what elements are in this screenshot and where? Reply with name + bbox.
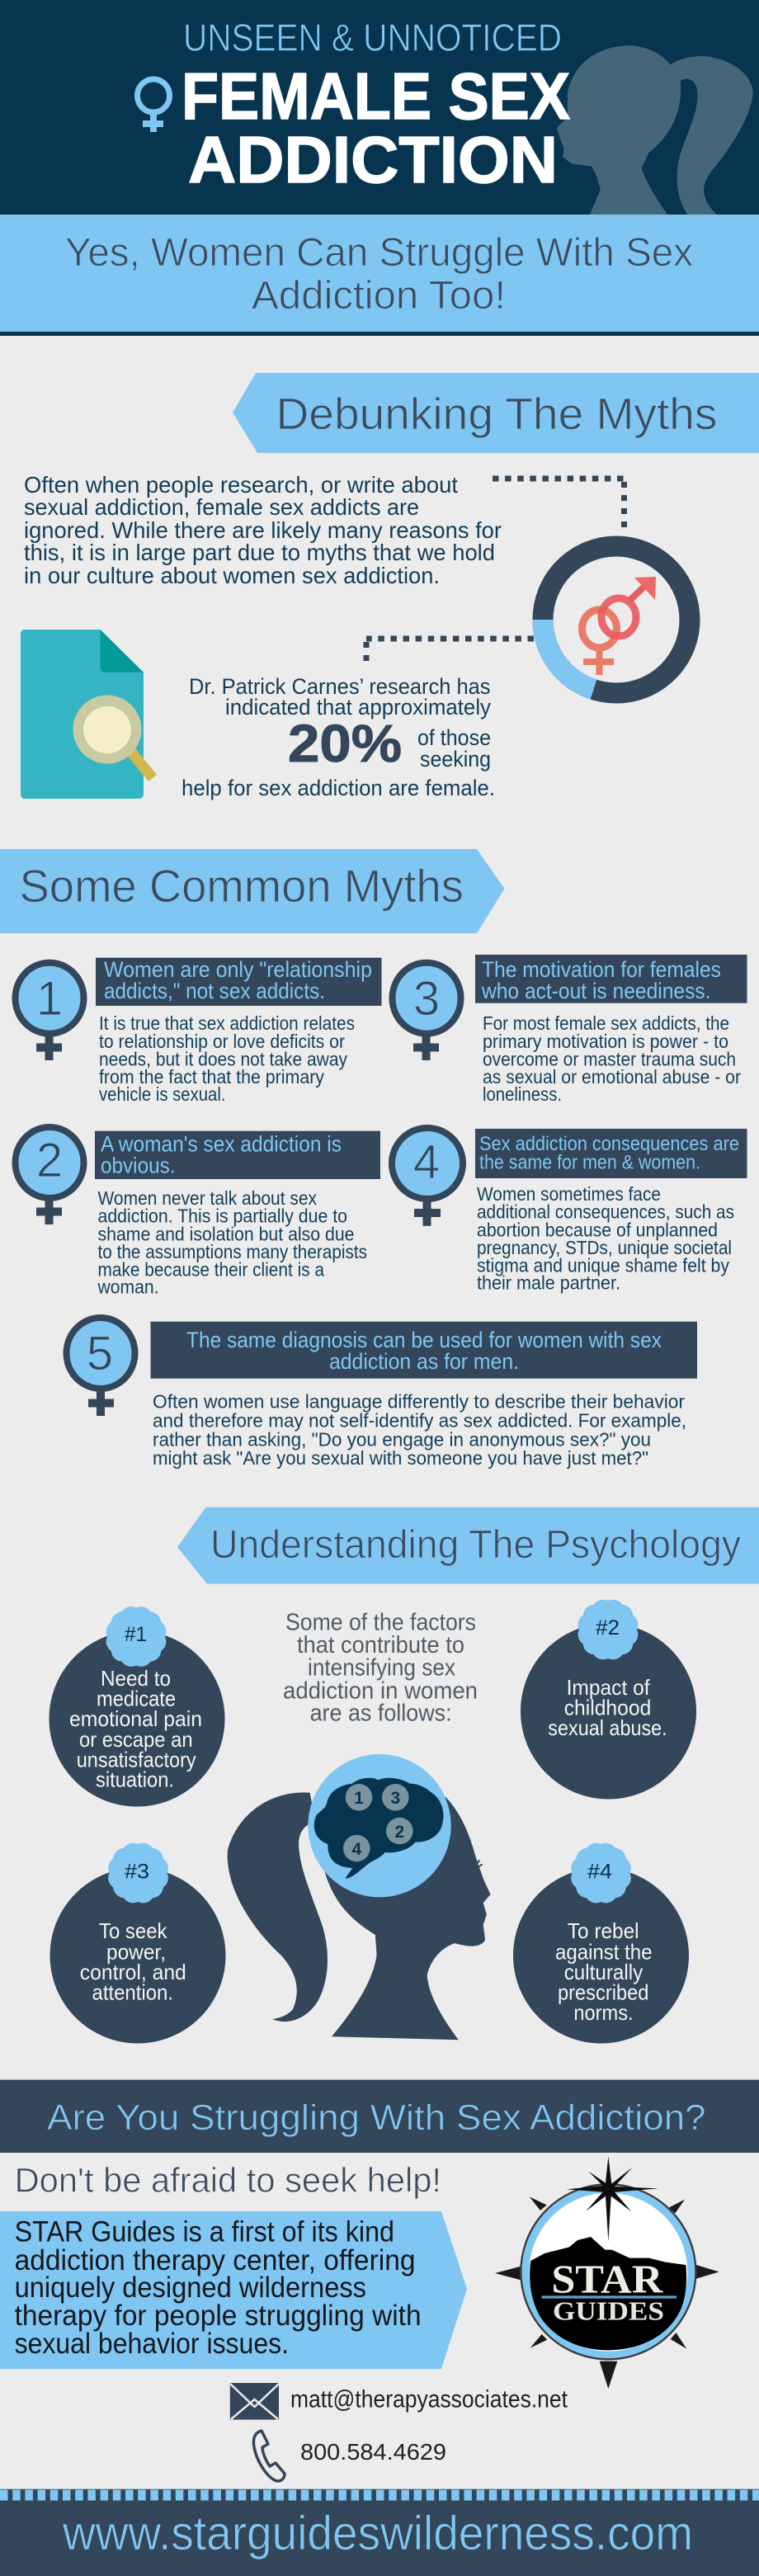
footer banner: website: www.starguideswilderness.com [62, 2507, 693, 2560]
contact: phone: 800.584.4629 [300, 2439, 446, 2465]
banner: understanding the psychology: Understanding The Psychology [210, 1523, 741, 1567]
myth 5 body: Often women use language differently to describe their behavior [153, 1391, 685, 1413]
statistic text: help for sex addiction are female. [182, 776, 495, 800]
myth 3 body: as sexual or emotional abuse - or [483, 1066, 741, 1087]
myth 3 body: loneliness. [483, 1083, 562, 1105]
myth 1 body: needs, but it does not take away [99, 1049, 347, 1070]
myth 4 heading: the same for men & women. [479, 1152, 700, 1174]
myth 3 heading: The motivation for females [482, 957, 721, 982]
heading: seek help: Don't be afraid to seek help! [15, 2161, 441, 2200]
intro text: contributing factors: are as follows: [310, 1701, 452, 1727]
intro text: contributing factors: that contribute to [297, 1632, 464, 1658]
myth 4 body: pregnancy, STDs, unique societal [477, 1237, 732, 1258]
myth 5 heading: addiction as for men. [329, 1349, 519, 1374]
statistic text [182, 674, 495, 800]
factor 1 text: unsatisfactory [77, 1748, 196, 1772]
icon: number 2 female symbol [15, 1127, 84, 1224]
icon: document with magnifier [21, 630, 153, 799]
myth 1 body [99, 1012, 355, 1105]
myth 3 [393, 955, 747, 1105]
myth 2 [15, 1127, 380, 1297]
title line: addiction: ADDICTION [188, 123, 558, 196]
icon: envelope [230, 2383, 279, 2419]
brain [314, 1778, 444, 1879]
myth 1 body: from the fact that the primary [99, 1066, 324, 1087]
myth 2 body: woman. [97, 1276, 158, 1297]
icon: number 1 female symbol [15, 963, 84, 1060]
myth 2 body [97, 1187, 367, 1297]
contact: email [230, 2383, 568, 2419]
myth 2 body: Women never talk about sex [97, 1187, 317, 1209]
icon: number 5 female symbol [66, 1318, 135, 1416]
myth 3 body [483, 1012, 741, 1105]
myth 3 heading: who act-out is neediness. [481, 979, 711, 1003]
factor 2 text: sexual abuse. [548, 1715, 667, 1740]
panel: star guides description [0, 2211, 467, 2369]
intro paragraph [24, 472, 502, 588]
icon: number 2 female symbol: 2 [36, 1134, 63, 1187]
icon: number 4 female symbol: 4 [413, 1135, 440, 1189]
myth 1 heading [96, 957, 381, 1006]
head silhouette [557, 45, 753, 215]
icon: number 3 female symbol: 3 [413, 972, 440, 1026]
panel: star guides description: therapy for people struggling with [15, 2300, 422, 2332]
myth 4 heading: Sex addiction consequences are [479, 1133, 739, 1155]
star [567, 2156, 658, 2242]
factor 4 text: against the [555, 1939, 652, 1964]
myth 2 heading: A woman's sex addiction is [101, 1132, 342, 1157]
banner: debunking the myths: Debunking The Myths [276, 389, 718, 439]
myth 1 body: to relationship or love deficits or [99, 1031, 345, 1052]
myth 2 body: shame and isolation but also due [97, 1223, 355, 1244]
myth 4 body: abortion because of unplanned [477, 1219, 718, 1240]
myth 4 heading [475, 1129, 747, 1178]
factor 3 circle [50, 1843, 226, 2043]
panel: star guides description: sexual behavior issues. [15, 2328, 289, 2360]
factor 2 text: Impact of [567, 1675, 650, 1700]
myth 3 body: For most female sex addicts, the [483, 1012, 729, 1034]
myth 1 heading: Women are only "relationship [104, 957, 372, 982]
logo: star guides compass [495, 2156, 719, 2389]
statistic text: of those [417, 725, 491, 750]
factor 3 text [80, 1918, 186, 2004]
intro paragraph: sexual addiction, female sex addicts are [24, 494, 419, 520]
myth 1 body: vehicle is sexual. [99, 1083, 226, 1105]
subtitle text line 1: Yes, Women Can Struggle With Sex [65, 231, 693, 275]
logo wordmark star: STAR [551, 2258, 664, 2301]
footer banner: website [0, 2489, 759, 2576]
logo wordmark guides: GUIDES [553, 2297, 664, 2326]
statistic text: Dr. Patrick Carnes’ research has [189, 674, 490, 699]
woman silhouette with brain [228, 1754, 491, 2040]
factor 2 text [548, 1675, 667, 1740]
brain: 1 [354, 1789, 364, 1808]
brain: 4 [351, 1840, 361, 1859]
statistic text: seeking [420, 747, 491, 771]
factor 4 text: To rebel [568, 1918, 639, 1943]
badge 2: #2 [596, 1616, 620, 1639]
factor 1 text: situation. [96, 1767, 174, 1791]
panel: star guides description: STAR Guides is a first of its kind [15, 2215, 394, 2248]
intro text: contributing factors: addiction in women [283, 1677, 478, 1704]
myth 4 body: stigma and unique shame felt by [477, 1255, 729, 1276]
intro text: contributing factors [283, 1609, 478, 1727]
myth 1 heading: addicts," not sex addicts. [104, 979, 325, 1003]
factor 1 circle [50, 1606, 224, 1807]
eyelash [474, 1860, 483, 1871]
brain: 2 [394, 1823, 404, 1842]
factor 2 text: childhood [564, 1695, 651, 1720]
badge 4: #4 [587, 1860, 612, 1883]
myth 2 heading [95, 1131, 380, 1179]
icon: number 5 female symbol: 5 [87, 1327, 113, 1380]
myth 5 body: and therefore may not self-identify as sex addicted. For example, [153, 1409, 686, 1431]
title line: unseen and unnoticed: UNSEEN & UNNOTICED [183, 17, 562, 59]
myth 3 heading [475, 955, 747, 1003]
factor 4 text: prescribed [558, 1979, 648, 2004]
factor 4 text [555, 1918, 652, 2025]
panel: star guides description: addiction therapy center, offering [15, 2244, 415, 2276]
factor 3 text: attention. [92, 1979, 173, 2004]
myth 4 body: their male partner. [477, 1272, 620, 1294]
banner: are you struggling [0, 2080, 759, 2153]
icon: number 1 female symbol: 1 [36, 972, 63, 1026]
head circle [308, 1754, 451, 1897]
myth 3 body: primary motivation is power - to [483, 1031, 728, 1052]
myth 4 body: additional consequences, such as [477, 1201, 734, 1223]
factor 1 text: Need to [101, 1666, 171, 1691]
intro text: contributing factors: Some of the factors [285, 1609, 476, 1635]
badge 1: #1 [125, 1623, 147, 1646]
myth 2 body: addiction. This is partially due to [97, 1205, 347, 1227]
factor 3 text: control, and [80, 1960, 186, 1984]
myth 2 body: make because their client is a [97, 1259, 324, 1281]
factor 1 text: or escape an [79, 1727, 193, 1752]
myth 5 heading [150, 1322, 697, 1379]
badge 2 [578, 1600, 638, 1659]
myth 2 heading: obvious. [101, 1154, 175, 1178]
compass ticks [495, 2196, 719, 2389]
header panel [0, 0, 759, 215]
factor 3 text: power, [106, 1939, 166, 1964]
mountain [530, 2237, 686, 2350]
panel: star guides description: uniquely designed wilderness [15, 2272, 366, 2304]
myth 5 [66, 1318, 697, 1469]
myth 5 body [153, 1391, 686, 1469]
subtitle text line 2: Addiction Too! [252, 274, 506, 318]
myth 4 body: Women sometimes face [477, 1183, 661, 1205]
icon: number 3 female symbol [393, 963, 460, 1060]
badge 1 [106, 1606, 166, 1667]
myth 5 body: rather than asking, "Do you engage in anonymous sex?" you [153, 1428, 651, 1450]
myth 2 body: to the assumptions many therapists [97, 1241, 367, 1262]
factor 1 text: emotional pain [69, 1706, 202, 1731]
badge 4 [571, 1843, 631, 1903]
contact: email: matt@therapyassociates.net [290, 2386, 568, 2413]
factor 4 circle [513, 1843, 689, 2043]
brain: 3 [390, 1789, 400, 1808]
banner: debunking the myths [233, 373, 759, 453]
intro paragraph: Often when people research, or write about [24, 472, 458, 498]
intro paragraph: ignored. While there are likely many reasons for [24, 517, 502, 543]
factor 4 text: culturally [564, 1960, 643, 1984]
myth 1 [15, 957, 381, 1105]
banner: some common myths: Some Common Myths [20, 860, 464, 912]
factor 1 text [69, 1666, 202, 1791]
banner: are you struggling: Are You Struggling With Sex Addiction? [47, 2097, 706, 2138]
title line: female sex: FEMALE SEX [182, 59, 570, 133]
myth 5 body: might ask "Are you sexual with someone you have just met?" [153, 1447, 648, 1469]
contact: phone [253, 2431, 446, 2481]
myth 1 body: It is true that sex addiction relates [99, 1012, 355, 1034]
myth 3 body: overcome or master trauma such [483, 1049, 736, 1070]
intro paragraph: in our culture about women sex addiction. [24, 563, 440, 588]
myth 4 body [477, 1183, 734, 1294]
factor 4 text: norms. [573, 2000, 634, 2025]
badge 3: #3 [125, 1860, 149, 1883]
factor 1 text: medicate [97, 1686, 176, 1710]
factor 2 circle [521, 1600, 696, 1799]
icon: number 4 female symbol [392, 1128, 463, 1226]
intro paragraph: this, it is in large part due to myths that we hold [24, 540, 495, 565]
donut chart: 20 percent [543, 546, 690, 693]
badge 3 [108, 1843, 168, 1903]
intro text: contributing factors: intensifying sex [308, 1655, 455, 1682]
factor 3 text: To seek [99, 1918, 167, 1943]
banner: understanding the psychology [177, 1507, 759, 1584]
icon: male and female symbols [582, 577, 656, 675]
subtitle band [0, 215, 759, 336]
banner: some common myths [0, 849, 505, 933]
myth 5 heading: The same diagnosis can be used for women with sex [186, 1328, 662, 1352]
statistic text: indicated that approximately [225, 695, 491, 719]
statistic: 20 percent: 20% [288, 714, 402, 773]
icon: female symbol [137, 79, 170, 132]
icon: phone handset [253, 2431, 285, 2481]
myth 4 [392, 1128, 747, 1294]
